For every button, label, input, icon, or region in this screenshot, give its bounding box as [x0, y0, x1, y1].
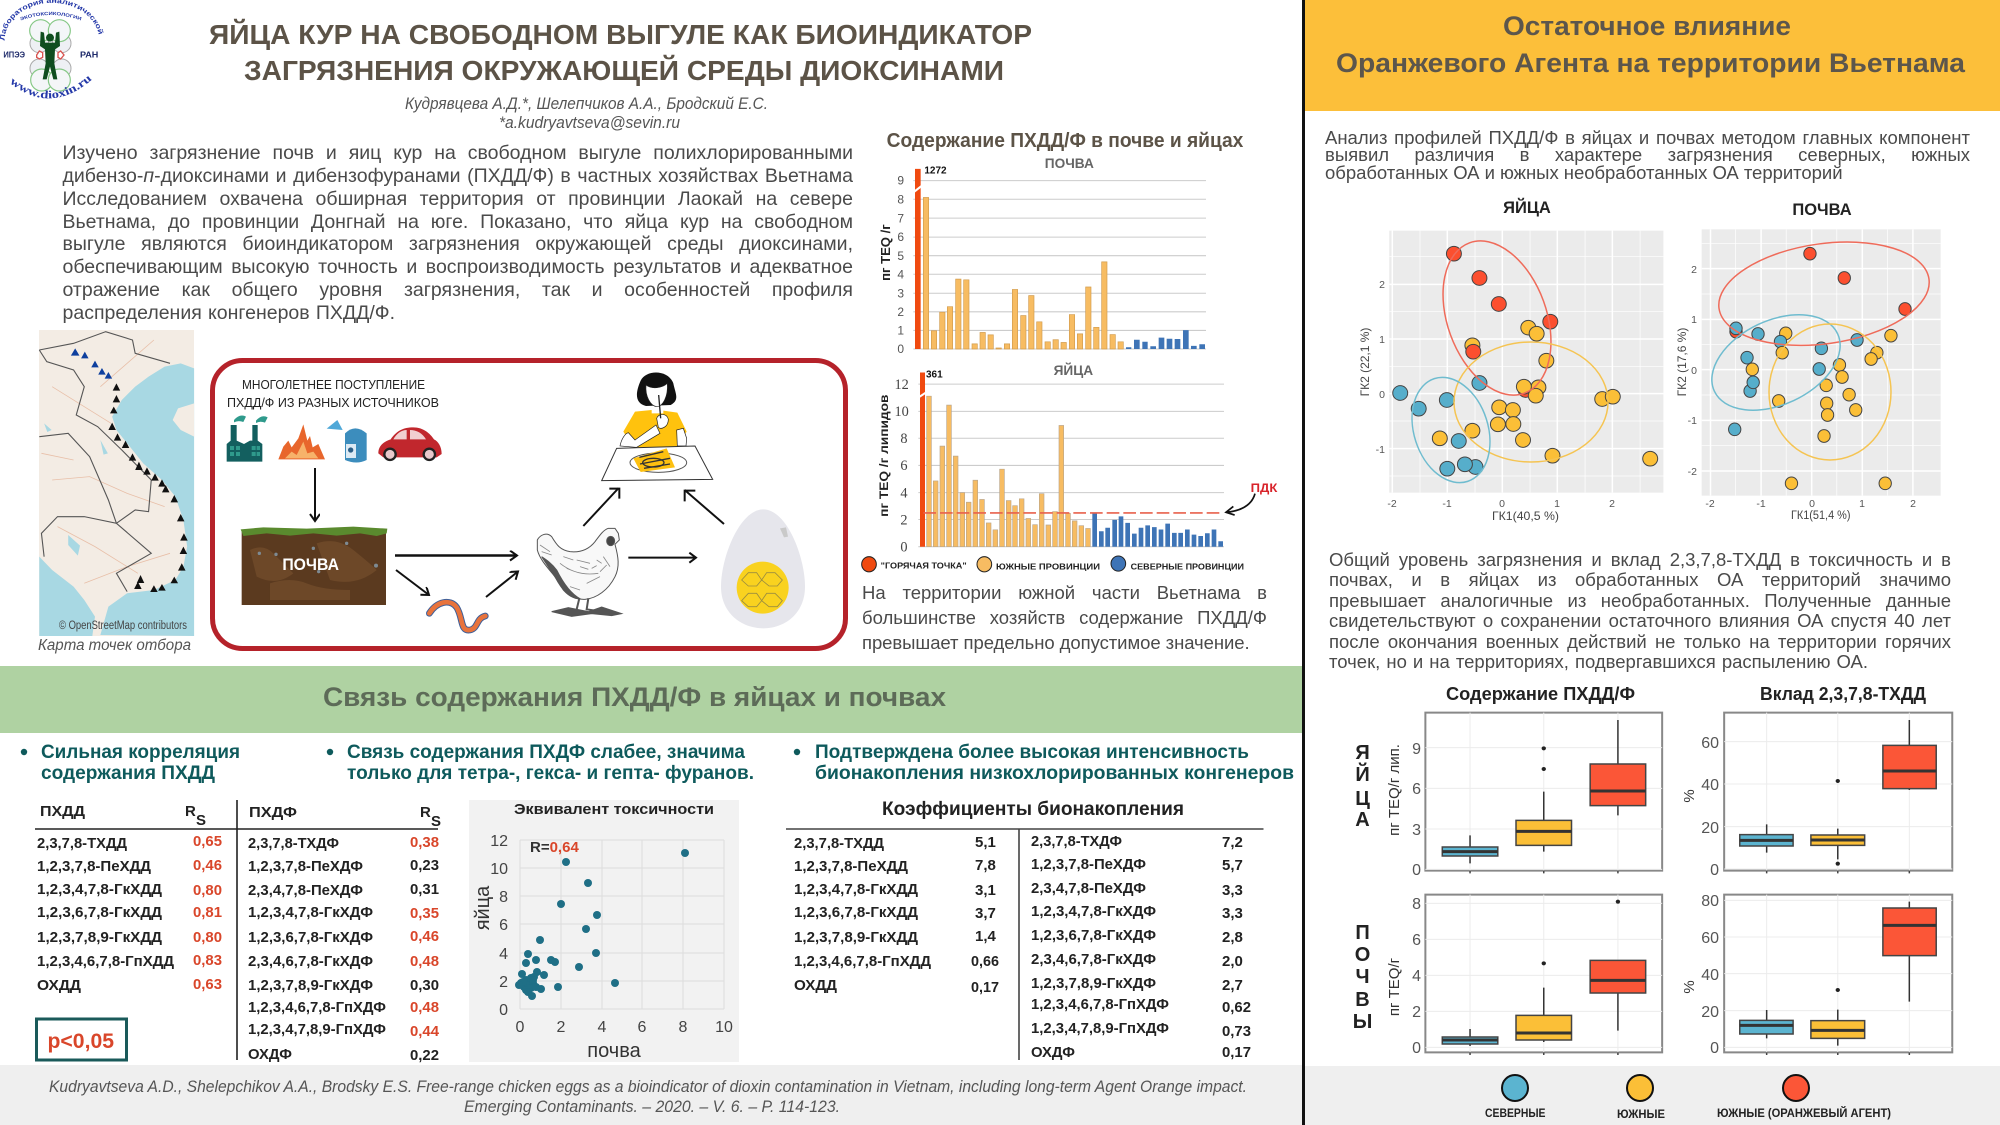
table: Spearman correlation: R	[420, 804, 431, 821]
bar chart: soil: 2	[897, 305, 904, 319]
table: Spearman correlation: 2,3,7,8-ТХДФ	[248, 835, 339, 852]
table: Spearman correlation: 0,80	[193, 883, 222, 899]
PCA scatter: soil: 1	[1859, 498, 1865, 510]
scatter chart: toxicity equivalent: 0	[499, 1002, 508, 1019]
table: bioaccumulation coefficients: ОХДД	[794, 977, 837, 994]
chart conclusion paragraph: превышает предельно допустимое значение.	[862, 632, 1250, 653]
PCA scatter: eggs: -1	[1376, 444, 1385, 456]
chart legend	[862, 556, 1244, 572]
title	[209, 18, 1032, 86]
bar chart: soil: 8	[897, 192, 904, 206]
bar chart: eggs: 12	[895, 377, 909, 393]
logo	[0, 0, 104, 98]
bar chart: eggs: 8	[900, 431, 908, 447]
title: ЗАГРЯЗНЕНИЯ ОКРУЖАЮЩЕЙ СРЕДЫ ДИОКСИНАМИ	[244, 54, 1004, 86]
row label: eggs: А	[1355, 809, 1370, 831]
table: bioaccumulation coefficients: 1,2,3,7,8,9-ГкХДФ	[1031, 975, 1156, 992]
PCA scatter: eggs: 1	[1379, 334, 1385, 346]
table with plate	[602, 446, 713, 481]
table: Spearman correlation: 0,63	[193, 977, 222, 993]
table: Spearman correlation: 2,3,4,6,7,8-ГкХДФ	[248, 953, 373, 970]
PCA scatter: soil: ГК2 (17,6 %)	[1675, 328, 1689, 396]
logo: ИПЭЭ	[3, 49, 25, 59]
table: bioaccumulation coefficients: 5,1	[975, 834, 996, 851]
citation footer: Emerging Contaminants. – 2020. – V. 6. – P. 114-123.	[464, 1097, 840, 1116]
scatter chart: toxicity equivalent: 0	[516, 1019, 525, 1036]
scatter chart: toxicity equivalent: 6	[499, 917, 508, 934]
significance box	[36, 1019, 126, 1060]
boxplot: soil TCDD contribution: 20	[1701, 1004, 1719, 1021]
icon: worm	[429, 602, 485, 630]
scatter chart: toxicity equivalent: Эквивалент токсичности	[514, 801, 714, 818]
PCA headings	[1503, 198, 1852, 219]
soil block: ПОЧВА	[282, 555, 339, 574]
abstract paragraph	[62, 142, 853, 324]
bullet: strong correlation: Сильная корреляция	[41, 742, 240, 763]
bar chart: soil: 9	[897, 174, 904, 188]
map caption: Карта точек отбора	[38, 637, 191, 654]
bar chart: soil: пг TEQ /г	[878, 224, 893, 281]
boxplot: soil content: 8	[1412, 896, 1421, 913]
boxplot: egg content: пг TEQ/г лип.	[1386, 744, 1403, 836]
bar chart: eggs: 4	[900, 485, 908, 502]
table: bioaccumulation coefficients: 3,7	[975, 905, 996, 922]
table: bioaccumulation coefficients: 0,62	[1222, 999, 1251, 1016]
table: bioaccumulation coefficients: 3,3	[1222, 905, 1243, 922]
table: Spearman correlation: 0,38	[410, 835, 439, 851]
PCA intro paragraph: Анализ профилей ПХДД/Ф в яйцах и почвах методом главных компонент	[1325, 126, 1970, 148]
row label: eggs: Ц	[1355, 788, 1370, 810]
bar chart: eggs: 10	[895, 404, 909, 420]
boxplot: egg TCDD contribution: 20	[1701, 820, 1719, 837]
PCA scatter: eggs: 1	[1554, 498, 1560, 510]
table: Spearman correlation: 1,2,3,4,7,8-ГкХДФ	[248, 904, 373, 921]
table: bioaccumulation coefficients: 2,3,7,8-ТХДД	[794, 835, 884, 852]
bar chart: soil: ПОЧВА	[1045, 155, 1094, 171]
bullet: weaker PCDF link	[327, 742, 754, 784]
bullet: strong correlation	[21, 742, 240, 784]
table: Spearman correlation: 0,30	[410, 978, 439, 994]
bullet: bioaccumulation: бионакопления низкохлорированных конгенеров	[815, 763, 1294, 784]
residual influence paragraph: превышает аналогичные из необработанных. Полученные данные	[1329, 590, 1951, 611]
table: bioaccumulation coefficients: ОХДФ	[1031, 1044, 1075, 1061]
right banner: Оранжевого Агента на территории Вьетнама	[1336, 48, 1966, 78]
boxplot: soil TCDD contribution: 80	[1701, 893, 1719, 910]
table: bioaccumulation coefficients: 5,7	[1222, 857, 1243, 874]
residual influence paragraph: после окончания военных действий не только на территории горячих	[1329, 631, 1951, 652]
group legend footer: ЮЖНЫЕ (ОРАНЖЕВЫЙ АГЕНТ)	[1717, 1105, 1891, 1120]
boxplot: egg TCDD contribution: %	[1681, 789, 1698, 803]
table: Spearman correlation: ОХДД	[37, 977, 81, 994]
PCA scatter: soil: 1	[1691, 314, 1697, 326]
bar chart: eggs: ЯЙЦА	[1054, 361, 1093, 378]
scatter chart: toxicity equivalent: 10	[490, 861, 508, 878]
row label: soils: П	[1355, 922, 1370, 944]
icon: fire	[278, 424, 325, 459]
boxplot: soil content: 4	[1412, 968, 1421, 985]
chart legend: СЕВЕРНЫЕ ПРОВИНЦИИ	[1131, 561, 1244, 571]
scatter chart: toxicity equivalent: 10	[715, 1019, 733, 1036]
logo: www.dioxin.ru	[12, 76, 92, 98]
table: bioaccumulation coefficients: 2,0	[1222, 953, 1243, 970]
table: Spearman correlation: 1,2,3,4,7,8,9-ГпХДФ	[248, 1021, 386, 1038]
row label: soils: Ы	[1353, 1011, 1372, 1033]
boxplot: soil TCDD contribution: 60	[1701, 930, 1719, 947]
scatter chart: toxicity equivalent: яйца	[472, 885, 494, 930]
table: bioaccumulation coefficients: 1,2,3,4,7,8-ГкХДФ	[1031, 903, 1156, 920]
scatter chart: toxicity equivalent: R=0,64	[530, 839, 579, 856]
title: ЯЙЦА КУР НА СВОБОДНОМ ВЫГУЛЕ КАК БИОИНДИКАТОР	[209, 18, 1032, 50]
scatter chart: toxicity equivalent: 12	[490, 833, 508, 850]
abstract paragraph: выгуле являются биоиндикатором загрязнения окружающей среды диоксинами,	[62, 233, 853, 255]
boxplot: soil content: 6	[1412, 932, 1421, 949]
table: Spearman correlation: 0,23	[410, 858, 439, 874]
bar chart: eggs: пг TEQ /г липидов	[877, 394, 891, 517]
table: bioaccumulation coefficients: 0,17	[971, 979, 999, 996]
map of sampling points: © OpenStreetMap contributors	[59, 620, 187, 632]
boxplot: soil content: 2	[1412, 1004, 1421, 1021]
boxplot: soil TCDD contribution: 40	[1701, 967, 1719, 984]
authors: *a.kudryavtseva@sevin.ru	[499, 113, 680, 132]
scatter chart: toxicity equivalent: 4	[598, 1019, 607, 1036]
map of sampling points	[39, 330, 194, 636]
authors: Кудрявцева А.Д.*, Шелепчиков А.А., Бродский Е.С.	[405, 94, 768, 113]
PCA scatter: soil	[1675, 229, 1941, 522]
bar chart: soil: 3	[897, 286, 904, 300]
PCA scatter: soil: ГК1(51,4 %)	[1791, 510, 1851, 522]
PCA scatter: soil: -1	[1756, 498, 1766, 510]
sources heading	[227, 377, 439, 410]
bar chart: soil: 4	[897, 267, 904, 281]
table: Spearman correlation: 1,2,3,7,8,9-ГкХДД	[37, 929, 162, 946]
scatter chart: toxicity equivalent: 4	[499, 946, 508, 963]
scatter chart: toxicity equivalent: 2	[557, 1019, 566, 1036]
boxplot: egg content	[1386, 713, 1662, 879]
table: bioaccumulation coefficients: 7,2	[1222, 834, 1243, 851]
bar chart: soil	[878, 155, 1206, 356]
arrow: egg to table	[685, 490, 724, 524]
scatter chart: toxicity equivalent: 8	[679, 1019, 688, 1036]
authors	[405, 94, 768, 132]
PCA scatter: soil: -2	[1688, 466, 1697, 478]
arrow: worm to hen	[486, 572, 518, 597]
bullet: weaker PCDF link: только для тетра-, гекса- и гепта- фуранов.	[347, 763, 754, 784]
table: Spearman correlation: ОХДФ	[248, 1046, 292, 1063]
PCA scatter: eggs: ГК1(40,5 %)	[1492, 509, 1559, 523]
table: bioaccumulation coefficients: 1,2,3,4,6,7,8-ГпХДФ	[1031, 996, 1169, 1013]
row label: soils	[1353, 922, 1372, 1033]
table: Spearman correlation	[35, 800, 441, 1064]
table: bioaccumulation coefficients: 2,3,7,8-ТХДФ	[1031, 833, 1122, 850]
boxplot: egg content: 6	[1412, 781, 1421, 798]
PCA scatter: soil: 0	[1691, 365, 1697, 377]
table: Spearman correlation: 1,2,3,4,6,7,8-ГпХДФ	[248, 999, 386, 1016]
boxplot: soil TCDD contribution: %	[1681, 980, 1698, 994]
boxplot: soil content	[1386, 895, 1662, 1057]
table: Spearman correlation: 0,83	[193, 953, 222, 969]
boxplot: egg TCDD contribution: 0	[1710, 862, 1719, 879]
citation footer: Kudryavtseva A.D., Shelepchikov A.A., Brodsky E.S. Free-range chicken eggs as a bioindicator of dioxin contamination in Vietnam, including long-term Agent Orange impact.	[49, 1077, 1247, 1096]
table: bioaccumulation coefficients: 3,1	[975, 882, 996, 899]
PCA scatter: eggs: 2	[1379, 279, 1385, 291]
table: bioaccumulation coefficients: 1,2,3,7,8-ПеХДД	[794, 858, 908, 875]
icon: egg with dioxin molecule	[721, 509, 805, 628]
PCA scatter: eggs: 0	[1379, 389, 1385, 401]
bullet: bioaccumulation: Подтверждена более высокая интенсивность	[815, 742, 1249, 763]
table: Spearman correlation: 0,48	[410, 954, 439, 970]
bullet: weaker PCDF link: Связь содержания ПХДФ слабее, значима	[347, 742, 745, 763]
right banner	[1305, 0, 2000, 111]
table: Spearman correlation: 0,22	[410, 1048, 439, 1064]
table: Spearman correlation: S	[431, 813, 441, 830]
scatter chart: toxicity equivalent: 2	[499, 974, 508, 991]
boxplot: egg content: 9	[1412, 741, 1421, 758]
table: Spearman correlation: 1,2,3,7,8,9-ГкХДФ	[248, 977, 373, 994]
icon: factory	[227, 416, 268, 462]
table: Spearman correlation: ПХДФ	[249, 804, 297, 821]
residual influence paragraph: Общий уровень загрязнения и вклад 2,3,7,8-ТХДД в токсичность и в	[1329, 548, 1951, 570]
section band: soil and egg link: Связь содержания ПХДД/Ф в яйцах и почвах	[323, 682, 946, 712]
table: bioaccumulation coefficients: 3,3	[1222, 882, 1243, 899]
icon: person eating	[620, 372, 687, 447]
table: bioaccumulation coefficients: 1,2,3,6,7,8-ГкХДФ	[1031, 927, 1156, 944]
table: bioaccumulation coefficients: 0,73	[1222, 1023, 1251, 1040]
chart legend: ЮЖНЫЕ ПРОВИНЦИИ	[996, 561, 1100, 571]
bullet: strong correlation: содержания ПХДД	[41, 763, 215, 784]
bar chart: eggs: 6	[900, 458, 908, 474]
soil block	[241, 527, 387, 605]
bar chart: soil: 6	[897, 230, 904, 244]
table: bioaccumulation coefficients: 1,2,3,6,7,8-ГкХДД	[794, 904, 918, 921]
table: bioaccumulation coefficients: 1,2,3,4,6,7,8-ГпХДД	[794, 953, 931, 970]
PCA scatter: soil: 0	[1809, 498, 1815, 510]
PCA scatter: eggs: -1	[1442, 498, 1452, 510]
table: Spearman correlation: 0,80	[193, 930, 222, 946]
residual influence paragraph	[1329, 548, 1951, 672]
sources heading: МНОГОЛЕТНЕЕ ПОСТУПЛЕНИЕ	[242, 377, 425, 392]
table: Spearman correlation: 0,48	[410, 1000, 439, 1016]
table: Spearman correlation: 0,44	[410, 1024, 439, 1040]
table: Spearman correlation: R	[185, 803, 196, 820]
PCA headings: ЯЙЦА	[1503, 198, 1551, 217]
table: Spearman correlation: 0,46	[193, 858, 222, 874]
residual influence paragraph: почвах, и в яйцах из обработанных ОА территорий значимо	[1329, 569, 1951, 590]
table: bioaccumulation coefficients	[786, 799, 1264, 1061]
group legend footer: ЮЖНЫЕ	[1617, 1107, 1665, 1121]
boxplot headings	[1446, 684, 1926, 704]
table: Spearman correlation: 1,2,3,6,7,8-ГкХДД	[37, 904, 162, 921]
bar chart: eggs: ПДК	[1251, 481, 1278, 495]
table: Spearman correlation: 0,65	[193, 834, 222, 850]
table: bioaccumulation coefficients: 0,66	[971, 953, 999, 970]
abstract paragraph: Изучено загрязнение почв и яиц кур на свободном выгуле полихлорированными	[62, 142, 853, 164]
group legend footer	[1305, 1066, 2000, 1125]
table: Spearman correlation: 0,31	[410, 882, 439, 898]
abstract paragraph: Исследованием охвачена обширная территория от провинции Лаокай на севере	[62, 188, 853, 210]
table: bioaccumulation coefficients: 2,8	[1222, 929, 1243, 946]
arrow: hen to table	[583, 488, 619, 526]
icon: car	[378, 427, 442, 460]
table: bioaccumulation coefficients: 1,2,3,4,7,8,9-ГпХДФ	[1031, 1020, 1169, 1037]
bar chart: soil: 7	[897, 211, 904, 225]
icon: spray can	[327, 420, 367, 462]
table: Spearman correlation: 0,81	[193, 905, 222, 921]
right banner: Остаточное влияние	[1503, 11, 1791, 41]
citation footer	[0, 1065, 1303, 1125]
boxplot: soil content: пг TEQ/г	[1386, 957, 1403, 1016]
arrow: sources to soil	[314, 468, 316, 521]
icon: hen	[537, 528, 622, 616]
sources heading: ПХДД/Ф ИЗ РАЗНЫХ ИСТОЧНИКОВ	[227, 395, 439, 410]
column divider	[1302, 0, 1305, 1125]
bar chart: soil: 0	[897, 342, 904, 356]
boxplot: soil TCDD contribution	[1681, 893, 1952, 1057]
table: bioaccumulation coefficients: 1,2,3,7,8,9-ГкХДД	[794, 929, 918, 946]
table: Spearman correlation: 1,2,3,4,6,7,8-ГпХДД	[37, 953, 174, 970]
table: bioaccumulation coefficients: 7,8	[975, 857, 996, 874]
arrow: soil to hen	[395, 554, 517, 557]
PCA scatter: soil: -2	[1705, 498, 1715, 510]
bullet: bioaccumulation	[794, 742, 1294, 784]
PCA scatter: soil: 2	[1910, 498, 1916, 510]
table: Spearman correlation: 2,3,4,7,8-ПеХДФ	[248, 882, 363, 899]
PCA scatter: eggs: ГК2 (22,1 %)	[1358, 328, 1372, 396]
table: bioaccumulation coefficients: 1,2,3,4,7,8-ГкХДД	[794, 881, 918, 898]
PCA intro paragraph: обработанных ОА и южных необработанных ОА территорий	[1325, 162, 1842, 183]
table: Spearman correlation: 1,2,3,6,7,8-ГкХДФ	[248, 929, 373, 946]
PCA headings: ПОЧВА	[1792, 201, 1852, 219]
table: bioaccumulation coefficients: 2,7	[1222, 977, 1243, 994]
bar chart: soil: 5	[897, 249, 904, 263]
abstract paragraph: дибензо-п-диоксинами и дибензофуранами (ПХДД/Ф) в частных хозяйствах Вьетнама	[62, 165, 853, 187]
table: Spearman correlation: ПХДД	[40, 803, 85, 820]
table: Spearman correlation: S	[196, 812, 206, 829]
boxplot: egg content: 3	[1412, 822, 1421, 839]
boxplot: soil TCDD contribution: 0	[1710, 1040, 1719, 1057]
PCA scatter: eggs: -2	[1387, 498, 1397, 510]
chart conclusion paragraph: большинстве хозяйств содержание ПХДД/Ф	[862, 607, 1267, 628]
bar chart: eggs: 2	[900, 512, 908, 528]
residual influence paragraph: точек, но и на территориях, подвергавшихся распылению ОА.	[1329, 651, 1868, 672]
chart legend: "ГОРЯЧАЯ ТОЧКА"	[881, 561, 967, 571]
PCA intro paragraph: выявил различия в характере загрязнения северных, южных	[1325, 144, 1970, 165]
significance box: p<0,05	[48, 1030, 114, 1053]
logo: РАН	[80, 49, 98, 59]
boxplot: egg TCDD contribution	[1681, 713, 1952, 879]
table: Spearman correlation: 1,2,3,7,8-ПеХДФ	[248, 858, 363, 875]
bar chart: eggs: 0	[900, 539, 908, 556]
table: Spearman correlation: 1,2,3,7,8-ПеХДД	[37, 858, 151, 875]
PCA scatter: eggs: 0	[1499, 498, 1505, 510]
abstract paragraph: отражение как общего уровня загрязнения, так и особенностей профиля	[62, 279, 853, 301]
boxplot headings: Содержание ПХДД/Ф	[1446, 684, 1635, 704]
table: bioaccumulation coefficients: 2,3,4,6,7,8-ГкХДФ	[1031, 951, 1156, 968]
boxplot: egg content: 0	[1412, 862, 1421, 879]
scatter chart: toxicity equivalent	[469, 800, 739, 1062]
row label: eggs: Й	[1355, 762, 1370, 786]
bar chart: eggs: 361	[926, 369, 943, 381]
residual influence paragraph: свидетельствуют о сохранении остаточного влияния ОА спустя 40 лет	[1329, 610, 1951, 631]
table: bioaccumulation coefficients: 1,4	[975, 928, 997, 945]
group legend footer: СЕВЕРНЫЕ	[1485, 1106, 1546, 1120]
boxplot: egg TCDD contribution: 60	[1701, 735, 1719, 752]
table: Spearman correlation: 0,46	[410, 929, 439, 945]
table: bioaccumulation coefficients: Коэффициенты бионакопления	[882, 799, 1184, 820]
boxplot headings: Вклад 2,3,7,8-ТХДД	[1760, 684, 1926, 704]
scatter chart: toxicity equivalent: 8	[499, 889, 508, 906]
scatter chart: toxicity equivalent: 6	[638, 1019, 647, 1036]
abstract paragraph: обеспечивающим высокую точность и воспроизводимость результатов и адекватное	[62, 256, 853, 278]
arrow: soil to worm	[396, 570, 429, 595]
section band: soil and egg link	[0, 666, 1303, 733]
table: Spearman correlation: 0,35	[410, 906, 439, 922]
chart heading: Содержание ПХДД/Ф в почве и яйцах	[887, 130, 1243, 152]
boxplot: egg TCDD contribution: 40	[1701, 777, 1719, 794]
chart conclusion paragraph: На территории южной части Вьетнама в	[862, 582, 1267, 603]
row label: eggs	[1355, 742, 1370, 831]
bar chart: eggs	[877, 361, 1278, 556]
row label: eggs: Я	[1355, 742, 1370, 764]
bar chart: soil: 1272	[924, 166, 947, 177]
scatter chart: toxicity equivalent: почва	[587, 1040, 642, 1062]
abstract paragraph: распределения конгенеров ПХДД/Ф.	[62, 302, 395, 324]
PCA intro paragraph	[1325, 126, 1970, 183]
boxplot: soil content: 0	[1412, 1040, 1421, 1057]
table: Spearman correlation: 1,2,3,4,7,8-ГкХДД	[37, 881, 162, 898]
panel: exposure pathway	[212, 360, 846, 648]
PCA scatter: eggs	[1358, 226, 1663, 523]
PCA scatter: soil: 2	[1691, 264, 1697, 276]
table: bioaccumulation coefficients: 0,17	[1222, 1044, 1251, 1061]
row label: soils: Ч	[1355, 966, 1370, 988]
row label: soils: В	[1355, 989, 1370, 1011]
PCA scatter: eggs: 2	[1609, 498, 1615, 510]
table: Spearman correlation: 2,3,7,8-ТХДД	[37, 835, 127, 852]
PCA scatter: soil: -1	[1688, 415, 1697, 427]
chart conclusion paragraph	[862, 582, 1267, 653]
arrow: hen to egg	[628, 553, 696, 563]
bar chart: soil: 1	[897, 323, 904, 338]
logo: ЭКОТОКСИКОЛОГИИ	[20, 12, 82, 20]
abstract paragraph: Вьетнама, до провинции Донгнай на юге. Показано, что яйца кур на свободном	[62, 211, 853, 233]
table: bioaccumulation coefficients: 2,3,4,7,8-ПеХДФ	[1031, 880, 1146, 897]
table: bioaccumulation coefficients: 1,2,3,7,8-ПеХДФ	[1031, 856, 1146, 873]
row label: soils: О	[1355, 944, 1370, 966]
